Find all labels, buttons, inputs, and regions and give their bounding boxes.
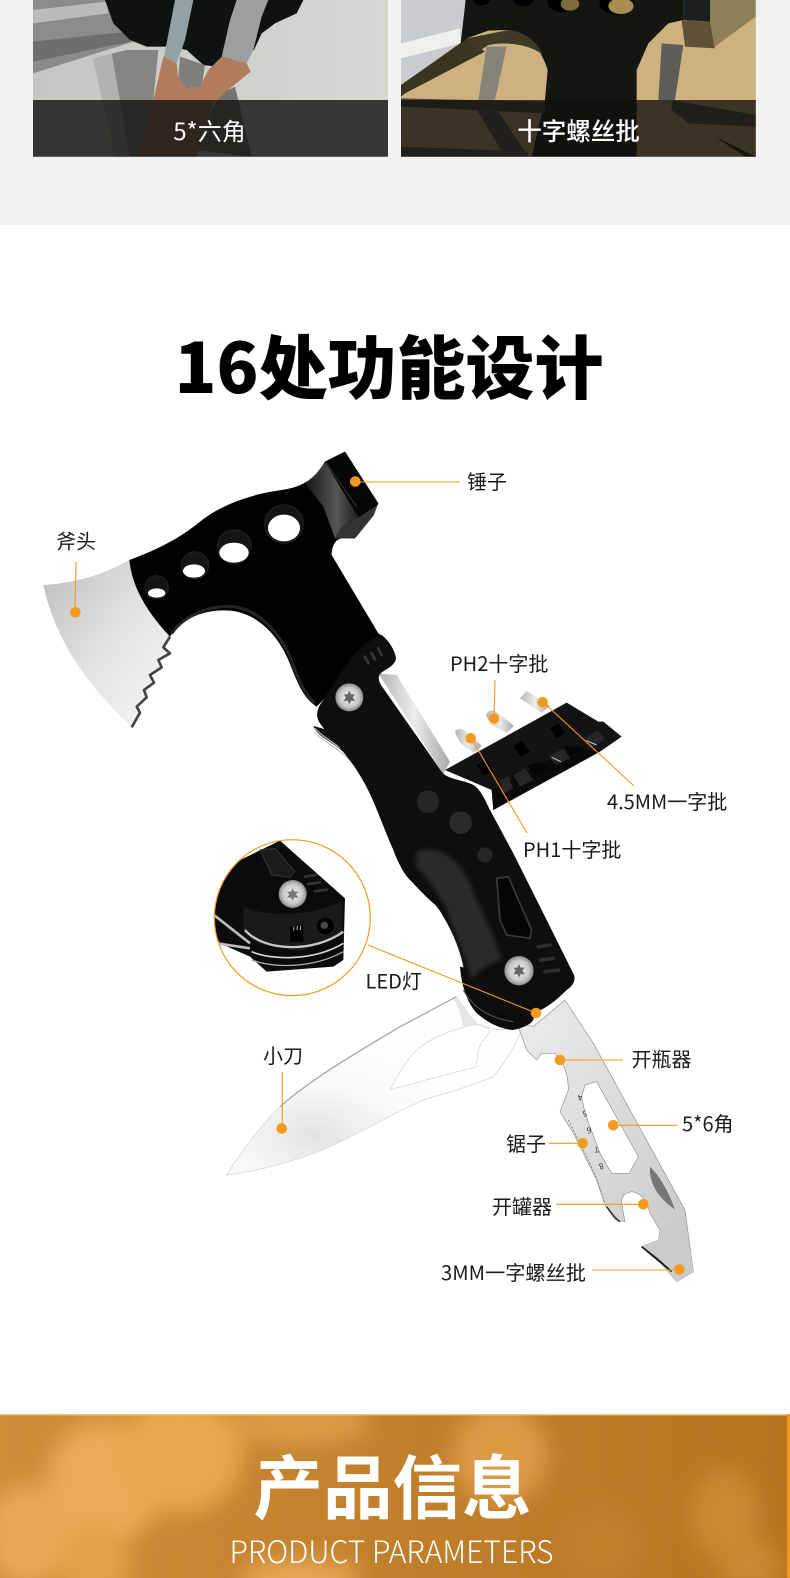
- fold-out multi-tool blade: 8: [597, 1160, 605, 1172]
- callout: LED灯: LED灯: [366, 966, 422, 994]
- screws: [335, 683, 534, 985]
- pocket knife blade: [227, 997, 522, 1175]
- caption bar: phillips: [401, 100, 756, 157]
- fold-out multi-tool blade: 7: [593, 1143, 600, 1155]
- callout: 4.5MM一字批: [537, 697, 727, 815]
- panel: 5*hex photo: [33, 0, 388, 157]
- callout: 开瓶器: [555, 1044, 692, 1072]
- banner subheading: PRODUCT PARAMETERS: PRODUCT PARAMETERS: [230, 1527, 554, 1572]
- callout: 小刀: 小刀: [263, 1040, 303, 1069]
- caption: 5*六角: 5*六角: [173, 112, 246, 147]
- callout: 5*6角: [608, 1108, 734, 1137]
- callout: 开罐器: [492, 1191, 649, 1220]
- callout: 4.5MM一字批: 4.5MM一字批: [607, 786, 727, 815]
- fold-out multi-tool blade: 5: [581, 1107, 588, 1119]
- fold-out multi-tool blade: 4: [576, 1091, 584, 1103]
- caption: 十字螺丝批: 十字螺丝批: [517, 113, 640, 148]
- axe head: [43, 452, 383, 727]
- callout: PH1十字批: [465, 733, 621, 863]
- fold-out multi-tool blade: [518, 1000, 693, 1282]
- illustration: multi-tool axe: [43, 452, 693, 1282]
- callout: 开罐器: 开罐器: [492, 1191, 552, 1220]
- callout: 斧头: [56, 526, 96, 618]
- callout: 3MM一字螺丝批: [441, 1257, 685, 1286]
- caption bar: 5*hex: [33, 100, 388, 157]
- callout: 锤子: 锤子: [467, 466, 507, 495]
- callout: PH2十字批: [450, 648, 548, 724]
- grey top section background: [0, 0, 790, 225]
- callout: 锯子: 锯子: [506, 1128, 546, 1157]
- callout: 小刀: [263, 1040, 303, 1134]
- callout: PH1十字批: PH1十字批: [523, 834, 621, 863]
- folding handle: [313, 635, 574, 1030]
- panel: phillips screwdriver photo: [401, 0, 756, 157]
- banner: product parameters: [0, 1397, 790, 1578]
- callout: 开瓶器: 开瓶器: [632, 1044, 692, 1072]
- bit holder with screwdriver bits: [445, 691, 622, 810]
- heading: 16处功能设计: 16处功能设计: [174, 313, 604, 413]
- banner heading: 产品信息: 产品信息: [254, 1433, 532, 1534]
- holes: [145, 505, 303, 599]
- callout: 锤子: [350, 466, 507, 495]
- callout: 锯子: [506, 1128, 588, 1157]
- callout: 3MM一字螺丝批: 3MM一字螺丝批: [441, 1257, 586, 1286]
- callout: LED灯: [366, 945, 541, 1018]
- callout: PH2十字批: PH2十字批: [450, 648, 548, 677]
- callout: 5*6角: 5*6角: [682, 1108, 734, 1137]
- inset: LED light close-up: [207, 840, 370, 996]
- fold-out multi-tool blade: 6: [585, 1124, 593, 1136]
- callout: 斧头: 斧头: [56, 526, 96, 554]
